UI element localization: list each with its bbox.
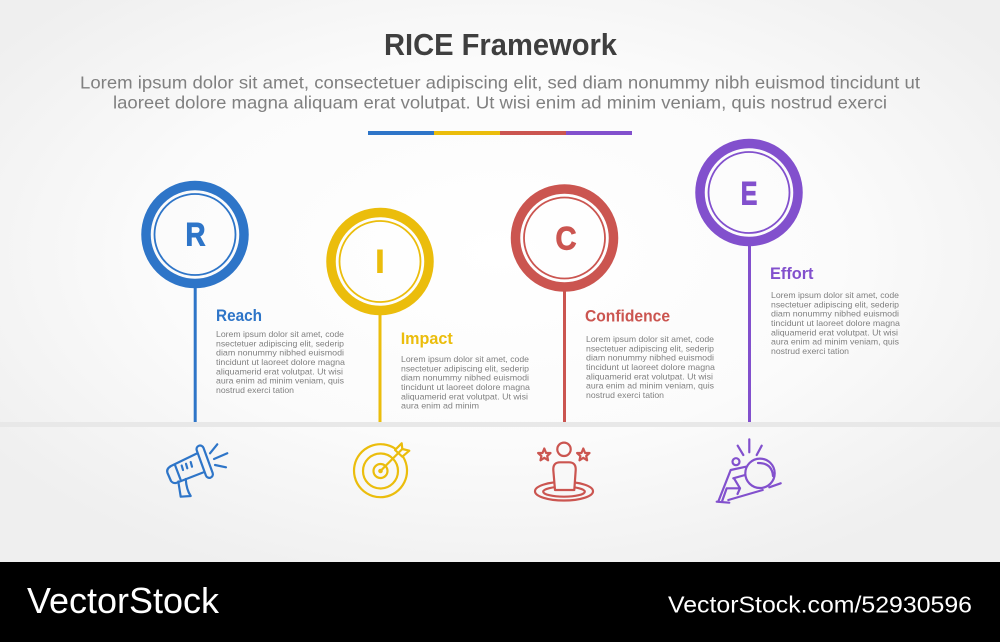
panel: reach [146,186,345,497]
icon: person pushing boulder [717,439,781,503]
body text: effort: nostrud exerci tation [771,347,849,356]
heading: effort: Effort [770,264,814,283]
body text: effort: aura enim ad minim veniam, quis [771,338,899,347]
body text: reach: nsectetuer adipiscing elit, sederip [216,339,344,348]
stem: effort [748,243,751,422]
body text: confidence: Lorem ipsum dolor sit amet, code [586,335,714,344]
icon: person with stars on target [535,443,593,501]
badge: C [516,189,614,287]
badge: I [331,212,429,310]
footer url: VectorStock.com/52930596 [668,592,972,618]
footer band [0,562,1000,642]
badge: E [700,144,798,242]
body text: impact [401,355,530,411]
subtitle text: laoreet dolore magna aliquam erat volutpat. Ut wisi enim ad minim veniam, quis nostrud exerci [113,92,887,112]
stem: impact [378,312,382,422]
body text: effort: Lorem ipsum dolor sit amet, code [771,291,899,300]
body text: reach: aliquamerid erat volutpat. Ut wisi [216,367,343,376]
panel: confidence [516,189,715,501]
heading: impact: Impact [401,329,453,348]
body text: effort: aliquamerid erat volutpat. Ut wisi [771,328,898,337]
body text: confidence: nsectetuer adipiscing elit, sederip [586,344,714,353]
panel: impact [331,212,530,497]
panel: effort [700,144,900,503]
badge: R: R [186,216,206,252]
body text: effort: tincidunt ut laoreet dolore magna [771,319,900,328]
title: RICE Framework [384,27,618,62]
subtitle text: Lorem ipsum dolor sit amet, consectetuer adipiscing elit, sed diam nonummy nibh euismod tincidunt ut [80,72,920,92]
body text: reach: aura enim ad minim veniam, quis [216,377,344,386]
icon: target with arrow [354,443,409,497]
body text: impact: aliquamerid erat volutpat. Ut wisi [401,392,528,401]
body text: confidence [586,335,715,400]
body text: impact: tincidunt ut laoreet dolore magna [401,383,530,392]
body text: impact: nsectetuer adipiscing elit, sederip [401,364,529,373]
heading: confidence: Confidence [585,306,670,326]
subtitle text [80,72,920,112]
badge: I: I [376,244,384,280]
heading: reach: Reach [216,306,262,325]
body text: effort: nsectetuer adipiscing elit, sederip [771,300,899,309]
body text: confidence: aura enim ad minim veniam, quis [586,382,714,391]
badge: E: E [741,175,757,211]
body text: reach: tincidunt ut laoreet dolore magna [216,358,345,367]
body text: confidence: diam nonummy nibhed euismodi [586,354,714,363]
body text: confidence: nostrud exerci tation [586,391,664,400]
stem: reach [194,285,197,422]
body text: impact: aura enim ad minim [401,402,479,411]
body text: effort [771,291,900,356]
body text: reach [216,330,345,395]
stem: confidence [563,289,566,422]
colour divider bar [368,131,632,135]
badge: R [146,186,244,284]
footer logo: VectorStock [27,580,220,621]
body text: reach: diam nonummy nibhed euismodi [216,349,344,358]
icon: megaphone [167,444,227,497]
body text: reach: nostrud exerci tation [216,386,294,395]
badge: C: C [556,220,576,256]
body text: impact: Lorem ipsum dolor sit amet, code [401,355,529,364]
body text: confidence: aliquamerid erat volutpat. Ut wisi [586,372,713,381]
body text: reach: Lorem ipsum dolor sit amet, code [216,330,344,339]
body text: confidence: tincidunt ut laoreet dolore magna [586,363,715,372]
body text: effort: diam nonummy nibhed euismodi [771,310,899,319]
body text: impact: diam nonummy nibhed euismodi [401,374,529,383]
